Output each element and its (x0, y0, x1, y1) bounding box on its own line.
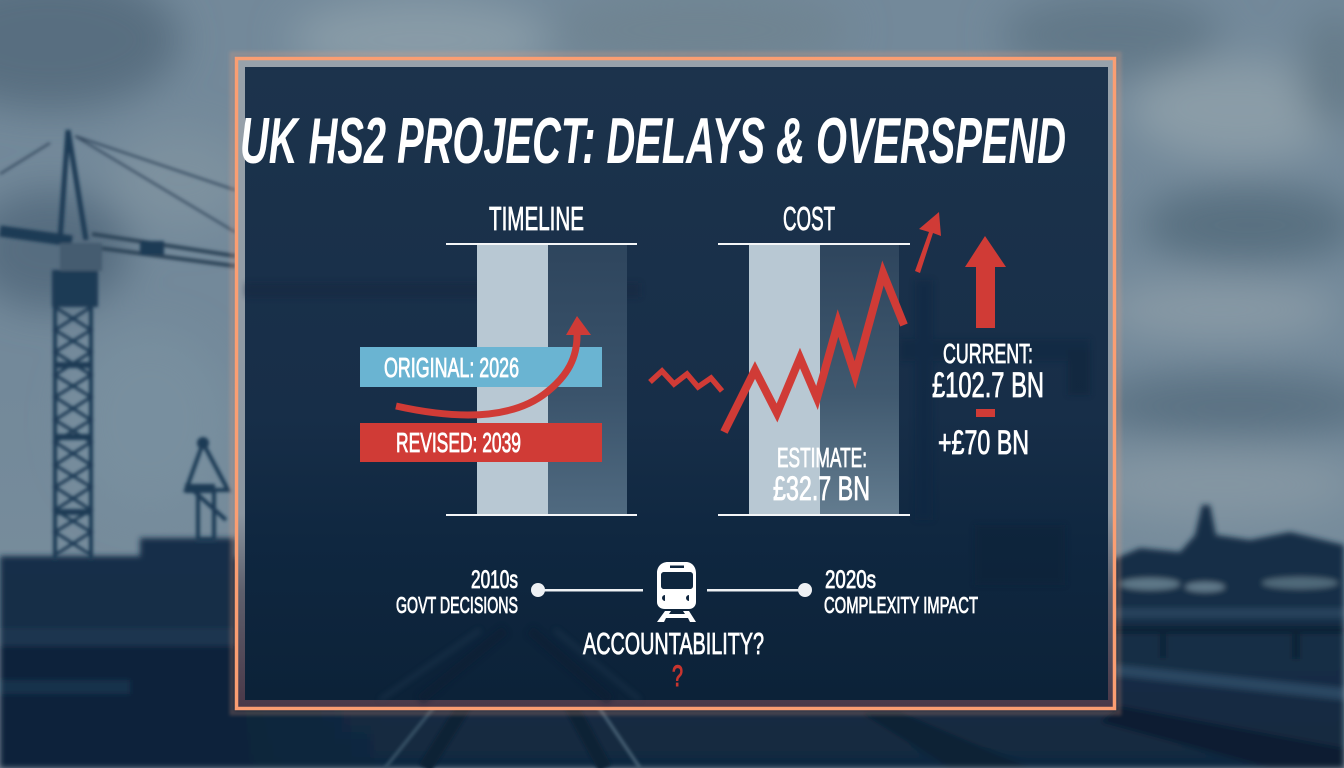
cost light column (749, 245, 820, 515)
estimate label: ESTIMATE: (777, 442, 867, 473)
current cost callout: +£70 BN (938, 424, 1029, 462)
2020s label: 2020s (825, 566, 876, 594)
revised date bar (360, 423, 602, 462)
ground (0, 505, 1344, 768)
icon: train (657, 562, 696, 622)
small crane (186, 443, 228, 540)
revised date bar: REVISED: 2039 (396, 427, 521, 458)
2020s label: COMPLEXITY IMPACT (824, 592, 978, 618)
tracks (385, 650, 640, 768)
timeline heading: TIMELINE (489, 200, 584, 237)
big up arrow (965, 236, 1006, 328)
small rising arrow (915, 212, 941, 273)
cost chart (718, 200, 941, 516)
estimate label (773, 442, 870, 508)
2010s label: 2010s (471, 566, 518, 594)
2010s label: GOVT DECISIONS (396, 592, 518, 618)
decade timeline (396, 562, 978, 693)
rising cost line (724, 273, 904, 432)
cost bottom rule (718, 514, 910, 516)
current cost callout (932, 338, 1044, 462)
right node and line (707, 583, 812, 597)
left node and line (531, 583, 643, 597)
2020s label (824, 566, 978, 618)
original date bar (360, 347, 602, 387)
timeline light column (477, 245, 548, 515)
cost top rule (718, 243, 910, 245)
original date bar: ORIGINAL: 2026 (384, 352, 519, 383)
accountability heading: ACCOUNTABILITY? (583, 626, 764, 661)
minus dash (976, 409, 995, 417)
timeline top rule (446, 243, 637, 245)
timeline bottom rule (446, 514, 637, 516)
cost heading: COST (783, 200, 835, 237)
tower crane (0, 130, 235, 560)
current cost callout: £102.7 BN (932, 366, 1044, 405)
red question mark: ? (672, 660, 683, 693)
current cost callout: CURRENT: (943, 338, 1033, 369)
panel frame (232, 54, 1119, 713)
panel background (245, 67, 1108, 700)
estimate label: £32.7 BN (773, 470, 870, 508)
timeline chart (360, 200, 637, 516)
timeline dark column (548, 245, 627, 515)
2010s label (396, 566, 518, 618)
cost dark column (820, 245, 899, 515)
connector zigzag (650, 371, 722, 391)
curved delay arrow (396, 316, 591, 415)
